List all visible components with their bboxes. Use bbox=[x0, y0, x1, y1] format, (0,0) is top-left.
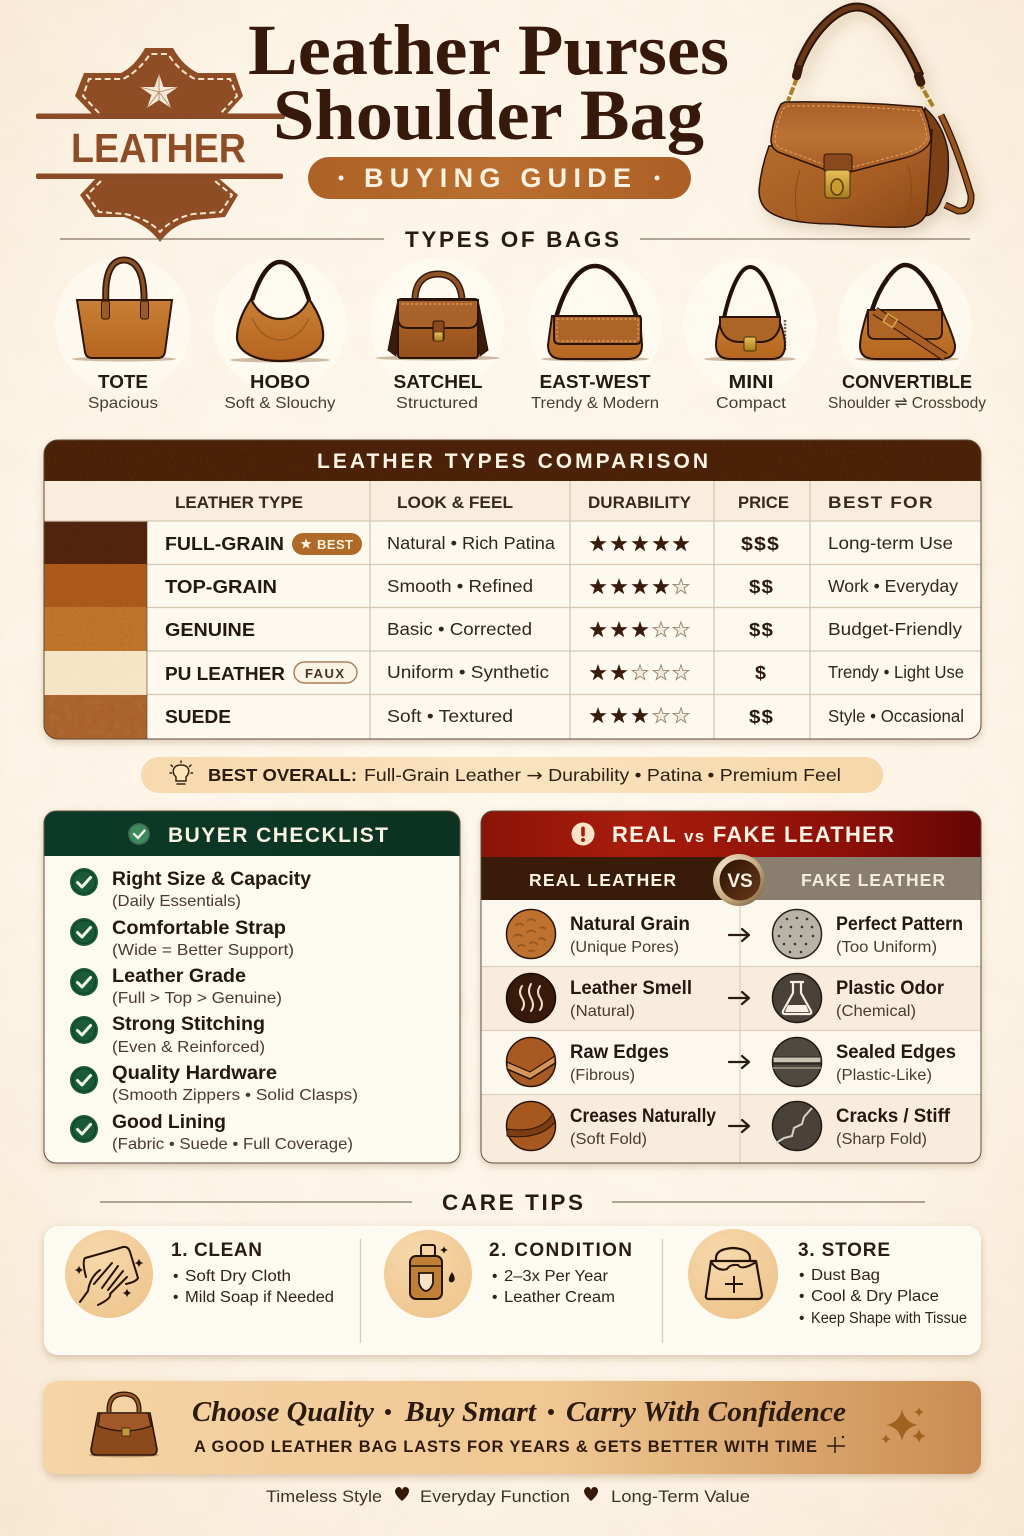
checklist item: grade: (Full > Top > Genuine) bbox=[112, 990, 282, 1007]
checklist item: lining bbox=[70, 1111, 353, 1153]
column headers: LEATHER TYPE bbox=[175, 494, 303, 512]
section heading: types of bags: TYPES OF BAGS bbox=[405, 227, 619, 252]
row: grain vs pattern: (Too Uniform) bbox=[836, 939, 937, 956]
row: smell vs odor: (Natural) bbox=[570, 1003, 635, 1020]
care tip: clean: Mild Soap if Needed bbox=[185, 1289, 334, 1306]
care tip: condition: • bbox=[492, 1268, 497, 1285]
bag type: satchel: Structured bbox=[396, 395, 478, 412]
banner headline: Buy Smart bbox=[404, 1397, 537, 1428]
banner headline bbox=[192, 1397, 846, 1428]
checklist item: stitching: (Even & Reinforced) bbox=[112, 1039, 265, 1056]
row: top-grain bbox=[165, 576, 958, 597]
care tip: condition: 2–3x Per Year bbox=[504, 1268, 608, 1285]
badge: vs: VS bbox=[727, 871, 753, 892]
row: top-grain: Work • Everyday bbox=[828, 576, 958, 596]
bag type: hobo bbox=[213, 258, 347, 412]
icon: natural grain bbox=[506, 910, 556, 958]
bag type: tote: Spacious bbox=[88, 395, 158, 412]
row: pu leather: PU LEATHER bbox=[165, 663, 285, 684]
icon: plastic odor bbox=[772, 974, 822, 1022]
row: full-grain bbox=[165, 533, 953, 555]
row: top-grain: Smooth • Refined bbox=[387, 576, 533, 596]
icon: leather smell bbox=[506, 974, 556, 1022]
care tip: condition bbox=[384, 1230, 632, 1318]
care tip: clean bbox=[65, 1230, 334, 1318]
row: pu leather: Trendy • Light Use bbox=[828, 662, 964, 682]
sub-header: real leather: REAL LEATHER bbox=[529, 870, 676, 890]
bag type: convertible: Shoulder ⇌ Crossbody bbox=[828, 395, 986, 412]
care tip: condition: 2. CONDITION bbox=[489, 1240, 632, 1261]
row: full-grain: Natural • Rich Patina bbox=[387, 533, 555, 553]
care tip: store: Dust Bag bbox=[811, 1267, 880, 1284]
badge: vs bbox=[713, 854, 765, 906]
checklist item: lining: (Fabric • Suede • Full Coverage) bbox=[112, 1136, 353, 1153]
care tip: store: • bbox=[799, 1288, 804, 1305]
care tip: clean: Soft Dry Cloth bbox=[185, 1268, 291, 1285]
footer tagline: Long-Term Value bbox=[611, 1487, 750, 1506]
row: top-grain: TOP-GRAIN bbox=[165, 576, 277, 597]
banner: choose quality bbox=[44, 1381, 981, 1474]
icon: sparkles bbox=[881, 1407, 926, 1444]
subtitle pill: buying guide bbox=[308, 157, 691, 199]
care tip: store: Cool & Dry Place bbox=[811, 1288, 939, 1305]
row: full-grain: Long-term Use bbox=[828, 533, 953, 553]
bag type: convertible: CONVERTIBLE bbox=[842, 372, 972, 392]
row: raw edges vs sealed edges bbox=[506, 1038, 956, 1086]
row: suede: SUEDE bbox=[165, 706, 231, 727]
row: grain vs pattern: Natural Grain bbox=[570, 913, 690, 935]
row: genuine: $$ bbox=[749, 619, 774, 640]
panel: care tips bbox=[44, 1226, 981, 1355]
checklist item: strap: (Wide = Better Support) bbox=[112, 942, 294, 959]
column headers: DURABILITY bbox=[588, 494, 691, 512]
column headers: PRICE bbox=[738, 494, 789, 512]
checklist item: size bbox=[70, 868, 311, 910]
bag type: satchel: SATCHEL bbox=[394, 372, 482, 392]
title bbox=[248, 10, 729, 155]
row: raw edges vs sealed edges: Raw Edges bbox=[570, 1041, 669, 1063]
row: suede bbox=[165, 706, 964, 727]
bag type: mini: Compact bbox=[716, 395, 787, 412]
checklist item: stitching bbox=[70, 1013, 265, 1056]
icon: cracks bbox=[772, 1102, 822, 1150]
bag type: east-west: EAST-WEST bbox=[540, 372, 650, 392]
row: genuine bbox=[165, 619, 962, 640]
hero illustration: shoulder bag bbox=[759, 7, 971, 227]
row: smell vs odor: Plastic Odor bbox=[836, 977, 944, 999]
row: smell vs odor: Leather Smell bbox=[570, 977, 692, 999]
heading: real vs fake: REAL vs FAKE LEATHER bbox=[612, 822, 894, 847]
row: genuine: Budget-Friendly bbox=[828, 619, 962, 639]
bag type: hobo: HOBO bbox=[250, 372, 310, 392]
row: full-grain: $$$ bbox=[741, 533, 780, 554]
icon: cloth and hand bbox=[65, 1230, 153, 1318]
panel: real vs fake leather bbox=[481, 811, 981, 1163]
icon: cream bottle bbox=[384, 1230, 472, 1318]
title: Shoulder Bag bbox=[273, 75, 704, 155]
banner headline: Choose Quality bbox=[192, 1397, 374, 1428]
bag type: mini bbox=[683, 258, 817, 412]
bag type: mini: MINI bbox=[728, 372, 774, 392]
checklist item: hardware: Quality Hardware bbox=[112, 1062, 277, 1084]
panel: leather types comparison table bbox=[44, 440, 981, 739]
bag type: east-west: Trendy & Modern bbox=[531, 395, 659, 412]
row: grain vs pattern bbox=[506, 910, 963, 958]
column headers: BEST FOR bbox=[828, 494, 934, 512]
care tip: clean: 1. CLEAN bbox=[171, 1240, 262, 1261]
row: raw edges vs sealed edges: Sealed Edges bbox=[836, 1041, 956, 1063]
callout: best overall: Full-Grain Leather → Durability • Patina • Premium Feel bbox=[364, 765, 841, 786]
icon: dust bag bbox=[688, 1229, 778, 1319]
care tip: store: • bbox=[799, 1310, 804, 1327]
bag type: convertible bbox=[828, 258, 986, 412]
row: genuine: GENUINE bbox=[165, 619, 255, 640]
title: Leather Purses bbox=[248, 10, 729, 90]
callout: best overall: BEST OVERALL: bbox=[208, 765, 357, 785]
panel: buyer checklist bbox=[44, 811, 460, 1163]
table heading: LEATHER TYPES COMPARISON bbox=[317, 450, 708, 473]
banner headline: Carry With Confidence bbox=[566, 1397, 846, 1428]
row: smell vs odor bbox=[506, 974, 944, 1022]
bag type: satchel bbox=[370, 258, 504, 412]
checklist item: size: (Daily Essentials) bbox=[112, 893, 241, 910]
column headers bbox=[175, 494, 934, 512]
icon: light bulb bbox=[170, 761, 192, 784]
care tip: clean: • bbox=[173, 1289, 178, 1306]
banner: choose quality: A GOOD LEATHER BAG LASTS FOR YEARS & GETS BETTER WITH TIME bbox=[194, 1438, 817, 1456]
checklist item: hardware: (Smooth Zippers • Solid Clasps) bbox=[112, 1087, 358, 1104]
row: grain vs pattern: (Unique Pores) bbox=[570, 939, 679, 956]
row: suede: Style • Occasional bbox=[828, 706, 964, 726]
sub-header: fake leather: FAKE LEATHER bbox=[801, 870, 945, 890]
checklist item: grade bbox=[70, 965, 282, 1007]
care tip: store bbox=[688, 1229, 967, 1327]
bag type: tote bbox=[55, 257, 191, 412]
row: creases vs cracks: (Sharp Fold) bbox=[836, 1131, 927, 1148]
row: smell vs odor: (Chemical) bbox=[836, 1003, 916, 1020]
checklist item: strap: Comfortable Strap bbox=[112, 917, 286, 939]
icon: raw edges bbox=[506, 1038, 556, 1086]
bag type: hobo: Soft & Slouchy bbox=[224, 395, 336, 412]
row: top-grain: $$ bbox=[749, 576, 774, 597]
row: genuine: Basic • Corrected bbox=[387, 619, 532, 639]
row: full-grain: BEST bbox=[317, 537, 353, 552]
row: pu leather bbox=[165, 662, 964, 684]
bag type: tote: TOTE bbox=[98, 372, 148, 392]
care tip: condition: • bbox=[492, 1289, 497, 1306]
checklist item: lining: Good Lining bbox=[112, 1111, 226, 1133]
care tip: store: 3. STORE bbox=[798, 1240, 890, 1261]
checklist item: grade: Leather Grade bbox=[112, 965, 246, 987]
row: suede: Soft • Textured bbox=[387, 706, 513, 726]
bag type: east-west bbox=[528, 258, 662, 412]
subtitle pill: buying guide: BUYING GUIDE bbox=[364, 163, 631, 193]
row: creases vs cracks: Cracks / Stiff bbox=[836, 1105, 950, 1127]
row: pu leather: Uniform • Synthetic bbox=[387, 662, 549, 682]
checklist item: size: Right Size & Capacity bbox=[112, 868, 311, 890]
checklist item: hardware bbox=[70, 1062, 358, 1104]
row: raw edges vs sealed edges: (Plastic-Like) bbox=[836, 1067, 932, 1084]
row: suede: $$ bbox=[749, 706, 774, 727]
row: raw edges vs sealed edges: (Fibrous) bbox=[570, 1067, 635, 1084]
checklist item: stitching: Strong Stitching bbox=[112, 1013, 265, 1035]
row: creases vs cracks: Creases Naturally bbox=[570, 1105, 716, 1127]
footer tagline: Everyday Function bbox=[420, 1487, 570, 1506]
section heading: care tips: CARE TIPS bbox=[442, 1190, 583, 1215]
checklist heading: BUYER CHECKLIST bbox=[168, 824, 388, 847]
row: creases vs cracks bbox=[506, 1102, 950, 1150]
care tip: store: Keep Shape with Tissue bbox=[811, 1310, 967, 1327]
row: creases vs cracks: (Soft Fold) bbox=[570, 1131, 647, 1148]
icon: sealed edges bbox=[772, 1038, 822, 1086]
row: grain vs pattern: Perfect Pattern bbox=[836, 913, 963, 935]
icon: creases bbox=[506, 1102, 556, 1150]
row: pu leather: FAUX bbox=[305, 666, 344, 681]
checklist item: strap bbox=[70, 917, 294, 959]
care tip: store: • bbox=[799, 1267, 804, 1284]
logo badge: leather: LEATHER bbox=[71, 125, 246, 171]
row: full-grain: FULL-GRAIN bbox=[165, 533, 284, 554]
icon: perfect pattern bbox=[772, 910, 822, 958]
footer tagline: Timeless Style bbox=[266, 1487, 382, 1506]
callout: best overall bbox=[141, 757, 883, 793]
column headers: LOOK & FEEL bbox=[397, 494, 513, 512]
care tip: clean: • bbox=[173, 1268, 178, 1285]
icon: handbag bbox=[89, 1394, 159, 1458]
logo badge: leather bbox=[36, 48, 285, 242]
row: pu leather: $ bbox=[755, 662, 767, 683]
footer tagline bbox=[266, 1487, 750, 1506]
care tip: condition: Leather Cream bbox=[504, 1289, 615, 1306]
